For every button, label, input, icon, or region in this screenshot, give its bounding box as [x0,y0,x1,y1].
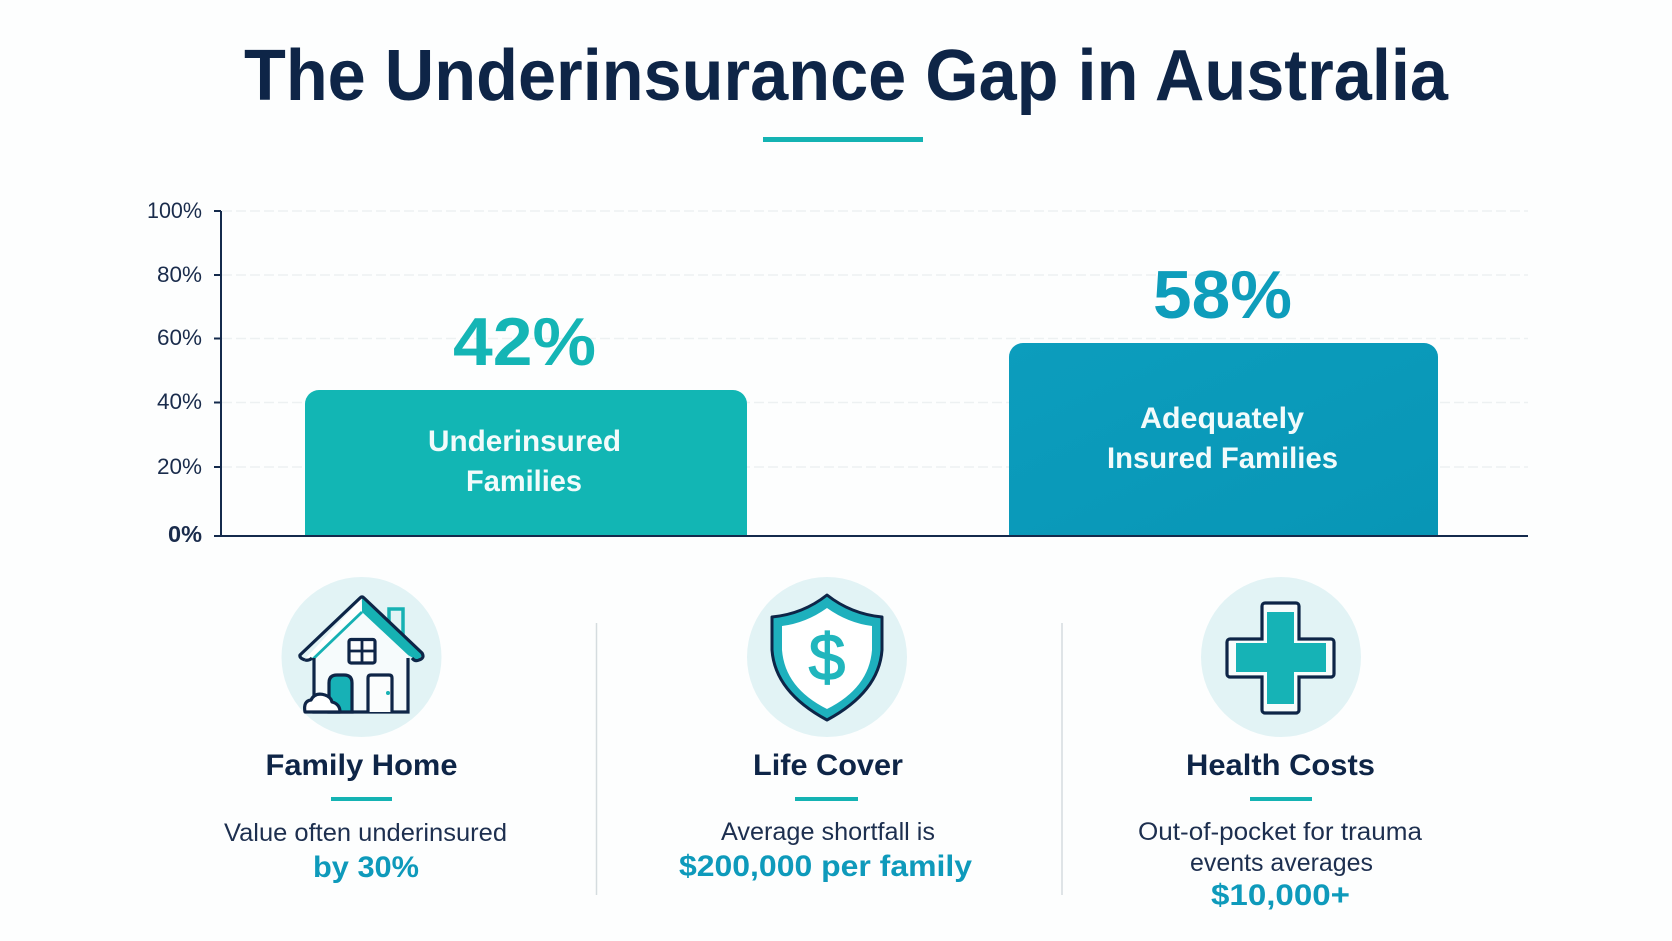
y axis: 100% [147,198,202,223]
y axis: 40% [157,389,202,414]
bar: adequately insured families 58%: Insured Families [1107,442,1338,475]
panel: family home [224,577,507,884]
bar: underinsured families 42% [305,304,747,536]
y axis [147,198,221,547]
bar: adequately insured families 58%: Adequately [1140,402,1304,435]
y axis: 0% [168,521,202,547]
text block: Out-of-pocket for trauma [1138,818,1422,846]
bar: adequately insured families 58% [1009,257,1438,536]
panel: family home: by 30% [313,851,419,884]
text block: Value often underinsured [224,819,507,847]
bar: underinsured families 42%: 42% [453,304,596,380]
bar: underinsured families 42%: Families [466,465,582,498]
bar: underinsured families 42%: Underinsured [428,425,621,458]
y axis: 80% [157,262,202,287]
panel: life cover [679,577,972,883]
title: The Underinsurance Gap in Australia [244,36,1449,116]
heading: Life Cover [753,749,903,782]
icon: shield [747,577,907,737]
bar chart [147,198,1528,547]
icon: medical cross [1201,577,1361,737]
heading: Family Home [266,749,458,782]
icon: house [282,577,442,737]
panel: life cover: $200,000 per family [679,850,972,883]
text block: Average shortfall is [721,818,935,846]
icon: shield: $ [809,620,845,694]
panel: health costs: $10,000+ [1211,879,1350,912]
y axis: 20% [157,454,202,479]
heading: Health Costs [1186,749,1375,782]
title underline [763,137,923,142]
panel: health costs: events averages [1190,849,1373,877]
bar: adequately insured families 58%: 58% [1153,257,1292,333]
y axis: 60% [157,325,202,350]
panel: health costs [1138,577,1422,912]
